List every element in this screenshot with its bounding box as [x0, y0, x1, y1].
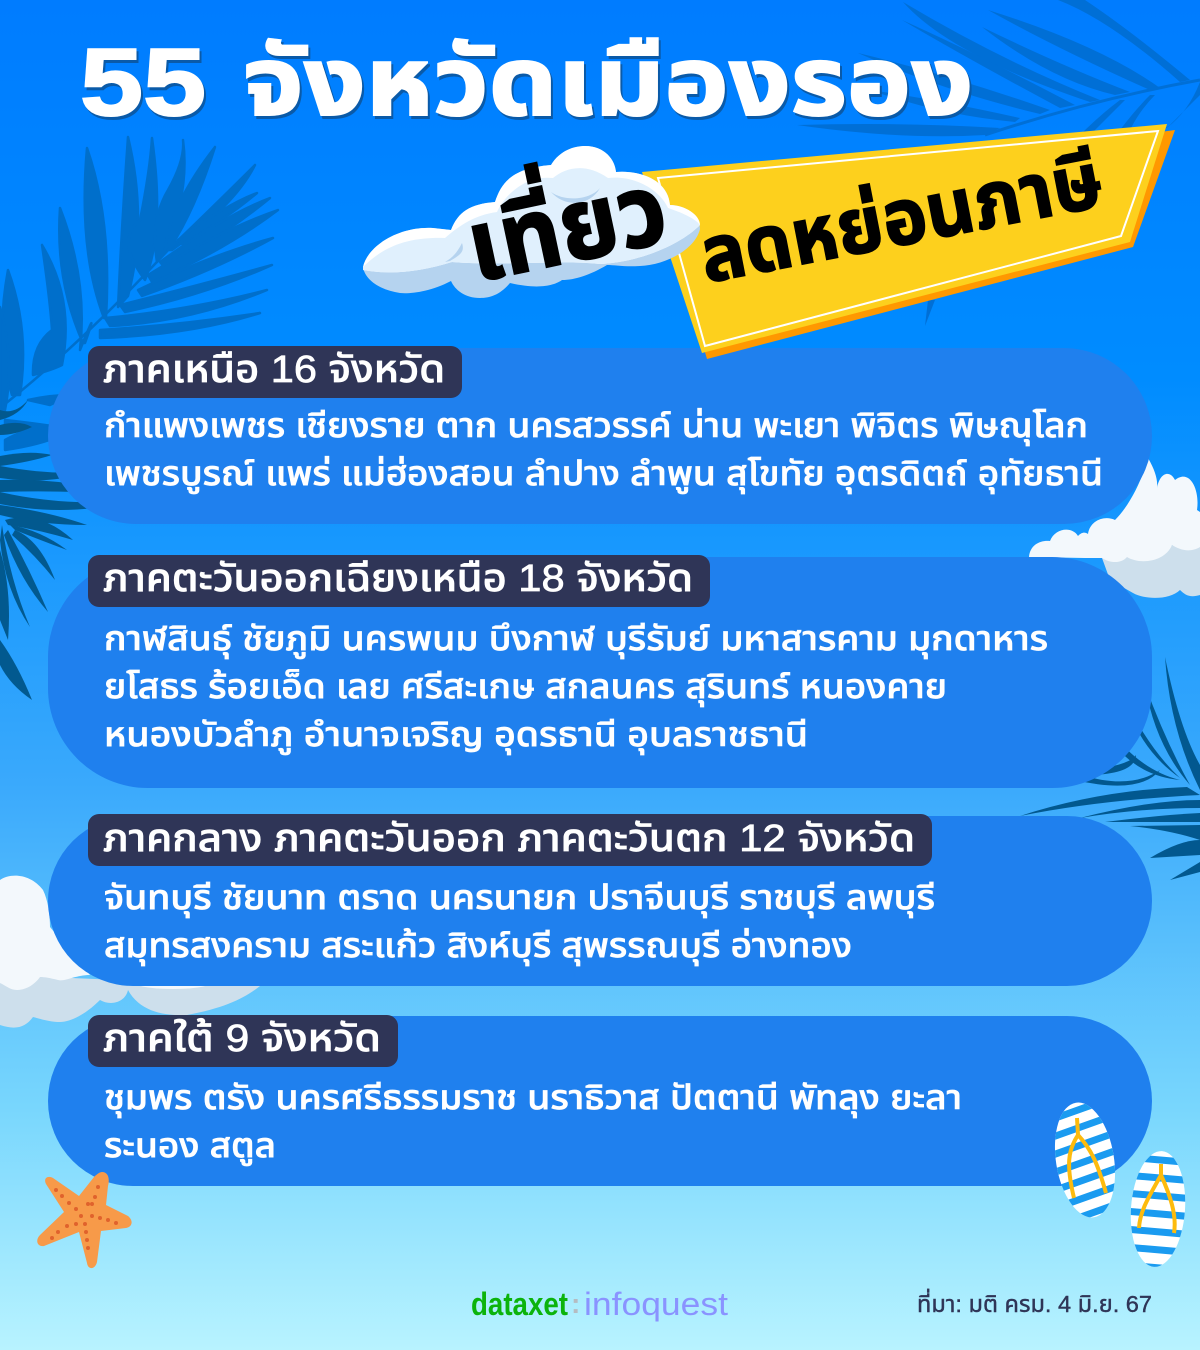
- provinces: south: [104, 1079, 962, 1166]
- provinces: south: ชุมพร ตรัง นครศรีธรรมราช นราธิวาส ปัตตานี พัทลุง ยะลา: [104, 1079, 962, 1118]
- provinces: north: [104, 407, 1103, 494]
- provinces: north: เพชรบูรณ์ แพร่ แม่ฮ่องสอน ลำปาง ลำพูน สุโขทัย อุตรดิตถ์ อุทัยธานี: [104, 455, 1103, 494]
- source note: ที่มา: มติ ครม. 4 มิ.ย. 67: [917, 1288, 1152, 1317]
- heading: north: ภาคเหนือ 16 จังหวัด: [103, 349, 445, 391]
- palm frond: top right: [797, 0, 1200, 326]
- word: tiao: เที่ยว: [454, 138, 676, 304]
- logo: [471, 1286, 728, 1322]
- palm frond: right dark: [1020, 657, 1200, 880]
- logo: dataxet: [471, 1286, 568, 1322]
- panel: central: [48, 816, 1152, 986]
- icon: flip flop right: [1130, 1151, 1186, 1267]
- panel: north: [48, 348, 1152, 524]
- heading: north: [88, 346, 462, 398]
- cloud: right: [1029, 458, 1200, 598]
- title: จังหวัดเมืองรอง: [243, 29, 973, 136]
- provinces: north: กำแพงเพชร เชียงราย ตาก นครสวรรค์ น่าน พะเยา พิจิตร พิษณุโลก: [104, 407, 1088, 446]
- provinces: northeast: ยโสธร ร้อยเอ็ด เลย ศรีสะเกษ สกลนคร สุรินทร์ หนองคาย: [104, 668, 947, 707]
- provinces: central: จันทบุรี ชัยนาท ตราด นครนายก ปราจีนบุรี ราชบุรี ลพบุรี: [104, 879, 935, 918]
- banner text: ลดหย่อนภาษี: [692, 135, 1110, 300]
- heading: northeast: ภาคตะวันออกเฉียงเหนือ 18 จังหวัด: [103, 558, 693, 600]
- heading: northeast: [88, 555, 710, 607]
- panel: south: [48, 1016, 1152, 1186]
- palm frond: top left: [0, 137, 278, 450]
- cloud: bottom left: [0, 876, 260, 1028]
- banner: yellow ribbon: [642, 124, 1175, 359]
- cloud with word: [363, 138, 700, 304]
- logo: :: [571, 1288, 580, 1319]
- provinces: central: สมุทรสงคราม สระแก้ว สิงห์บุรี สุพรรณบุรี อ่างทอง: [104, 927, 852, 966]
- panel: northeast: [48, 557, 1152, 788]
- provinces: central: [104, 879, 935, 966]
- provinces: northeast: หนองบัวลำภู อำนาจเจริญ อุดรธานี อุบลราชธานี: [104, 716, 808, 755]
- icon: starfish: [37, 1172, 132, 1268]
- provinces: northeast: กาฬสินธุ์ ชัยภูมิ นครพนม บึงกาฬ บุรีรัมย์ มหาสารคาม มุกดาหาร: [104, 620, 1048, 659]
- heading: south: ภาคใต้ 9 จังหวัด: [103, 1018, 381, 1060]
- heading: central: ภาคกลาง ภาคตะวันออก ภาคตะวันตก 12 จังหวัด: [103, 818, 915, 860]
- icon: flip flop left: [1054, 1102, 1116, 1218]
- title: 55: [80, 29, 206, 136]
- logo: infoquest: [584, 1286, 728, 1322]
- provinces: south: ระนอง สตูล: [104, 1127, 276, 1166]
- provinces: northeast: [104, 620, 1048, 755]
- heading: south: [88, 1015, 398, 1067]
- palm frond: left dark: [0, 400, 142, 700]
